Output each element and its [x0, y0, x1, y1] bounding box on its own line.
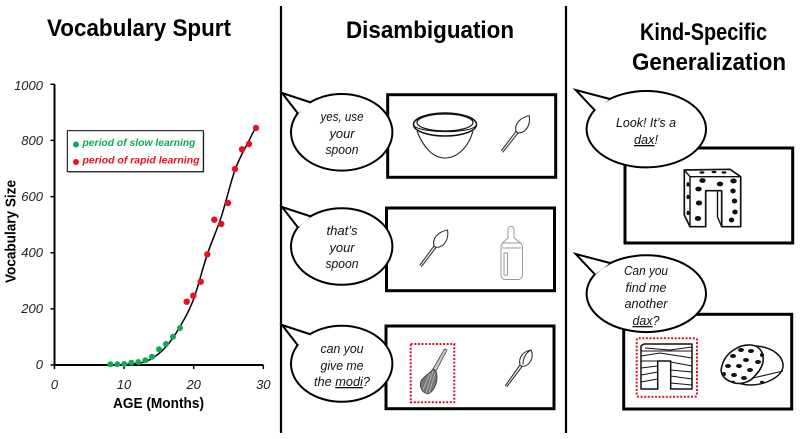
icon: spoon [420, 230, 448, 266]
chart: vocabulary size by age [2, 78, 271, 412]
y axis labels: 400 [21, 245, 44, 260]
panel: generalization scene 1 [576, 90, 793, 243]
bubble text: can you [320, 341, 364, 356]
speech bubble [576, 254, 706, 332]
bubble text: spoon [326, 142, 358, 157]
bubble text: find me [626, 280, 666, 295]
picture frame [624, 314, 792, 409]
heading: Kind-Specific Generalization: Generalization [632, 49, 786, 76]
x axis labels: 20 [185, 377, 202, 392]
bubble text: spoon [326, 256, 358, 271]
bubble text: yes, use [320, 109, 364, 124]
y axis labels: 800 [21, 133, 44, 148]
icon: spoon [502, 116, 530, 152]
icon: striped dax block [641, 344, 692, 389]
icon: whisk [420, 349, 447, 394]
target selection: striped dax [637, 338, 697, 397]
x axis labels: 0 [51, 377, 59, 392]
heading: Kind-Specific Generalization [632, 19, 786, 76]
panel: disambiguation scene 2 [282, 207, 554, 291]
y axis labels: 200 [20, 301, 44, 316]
panel: generalization scene 2 [576, 254, 792, 409]
picture frame [388, 95, 556, 177]
x axis labels: 10 [117, 377, 132, 392]
fitted curve [110, 128, 256, 365]
rapid learning points [184, 125, 259, 305]
x axis labels: 30 [256, 377, 271, 392]
heading: Disambiguation: Disambiguation [346, 17, 514, 44]
bubble text: your [329, 126, 355, 141]
icon: dotted dax block [684, 169, 741, 227]
speech bubble [282, 207, 392, 285]
speech bubble [576, 90, 706, 167]
speech bubble [282, 325, 392, 402]
bubble text [320, 109, 364, 157]
bubble text: another [624, 296, 668, 311]
bubble text [326, 223, 358, 271]
bubble text [314, 341, 371, 389]
slow learning points [107, 325, 183, 367]
legend: period of rapid learning [82, 154, 200, 166]
bubble text: dax? [632, 313, 660, 328]
y axis labels: 600 [21, 189, 44, 204]
y axis labels [14, 78, 44, 372]
bubble text: the modi? [314, 374, 371, 389]
y axis labels: 0 [36, 357, 44, 372]
heading: Vocabulary Spurt: Vocabulary Spurt [47, 15, 231, 42]
bubble text [616, 115, 676, 147]
panel: disambiguation scene 3 [282, 325, 554, 409]
bubble text [624, 263, 668, 328]
icon: baby bottle [501, 226, 522, 280]
target selection: whisk [411, 344, 454, 402]
picture frame [625, 148, 793, 243]
panel: disambiguation scene 1 [282, 93, 556, 177]
bubble text: Look! It’s a [616, 115, 676, 130]
bubble text: dax! [634, 132, 658, 147]
legend: period of slow learning [82, 137, 196, 149]
bubble text: that’s [326, 223, 358, 238]
picture frame [386, 326, 554, 409]
icon: bowl [414, 113, 476, 158]
x axis title: AGE (Months) [113, 395, 204, 412]
bubble text: give me [320, 358, 364, 373]
y axis title: Vocabulary Size [2, 180, 20, 283]
bubble text: your [329, 240, 355, 255]
x axis labels [51, 377, 271, 392]
bubble text: Can you [624, 263, 668, 278]
picture frame [386, 208, 554, 291]
heading: Kind-Specific Generalization: Kind-Specific [640, 19, 767, 46]
icon: dotted disc [721, 345, 783, 385]
speech bubble [282, 93, 392, 171]
legend [67, 131, 204, 173]
icon: spoon [506, 350, 532, 386]
y axis labels: 1000 [14, 78, 44, 93]
axes [50, 84, 263, 369]
